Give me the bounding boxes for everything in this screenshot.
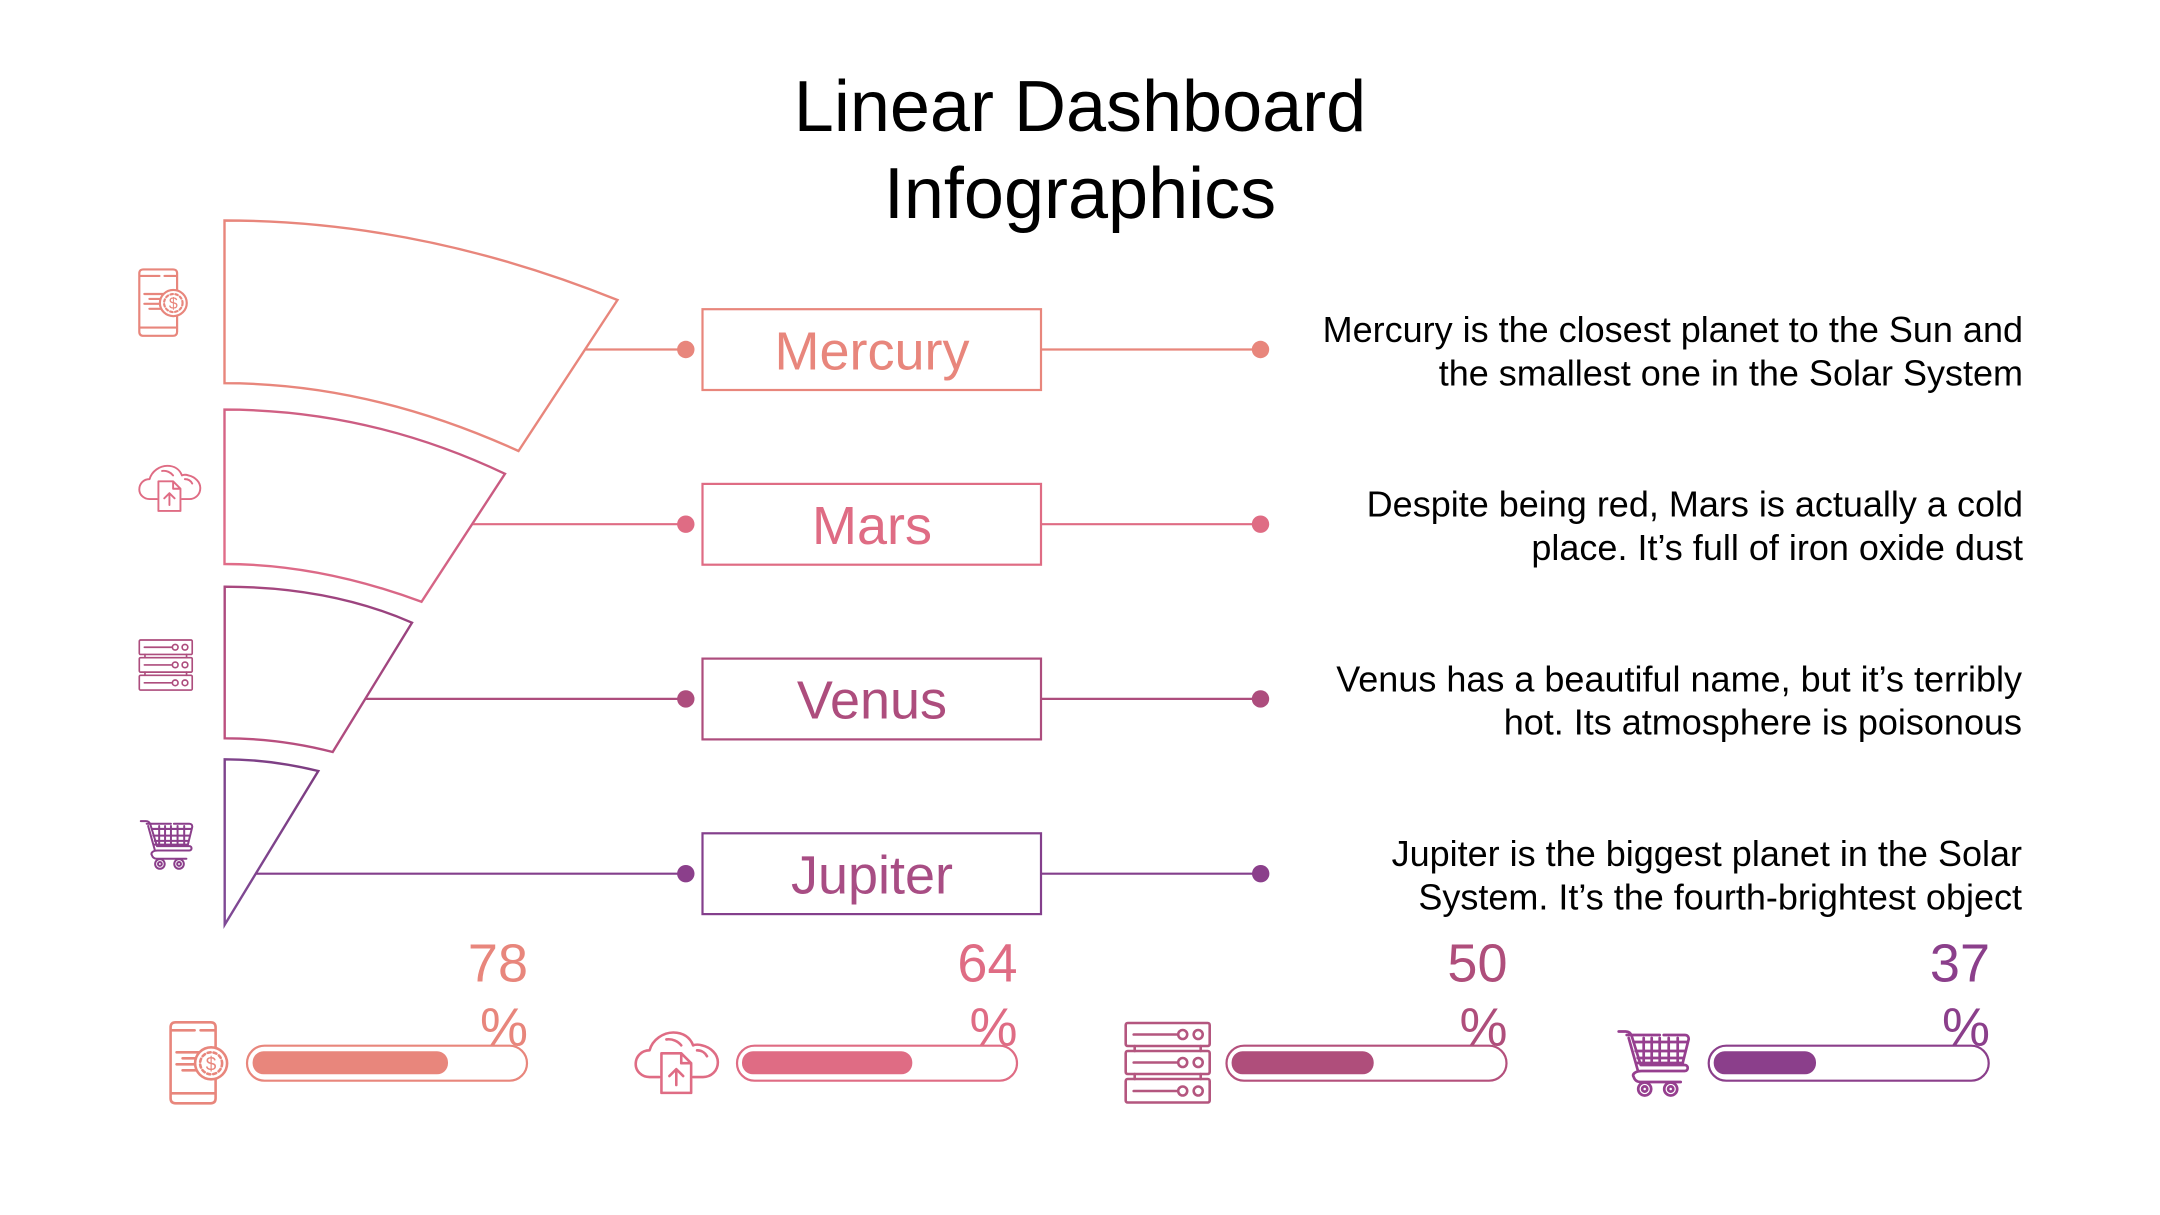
icon: cloud upload xyxy=(636,1032,718,1093)
row: Venus xyxy=(366,659,1269,739)
gauge: Jupiter 37%: 37 xyxy=(1930,934,1990,994)
gauge: Venus 50%: 50 xyxy=(1447,934,1508,994)
icon: phone with coin (left): $ xyxy=(169,296,178,313)
gauge: Mercury 78% xyxy=(171,934,528,1103)
gauge: Mercury 78%: % xyxy=(480,998,528,1058)
icon: shopping cart xyxy=(1619,1032,1689,1096)
funnel segment: Mars xyxy=(224,410,505,602)
gauge: Jupiter 37%: % xyxy=(1942,998,1990,1058)
icon: phone with coin xyxy=(171,1022,227,1103)
gauge: Mars 64%: % xyxy=(969,998,1018,1058)
description: Jupiter: System. It’s the fourth-brightest object xyxy=(1418,876,2022,917)
description: Jupiter: Jupiter is the biggest planet in the Solar xyxy=(1392,833,2022,874)
icon: phone with coin: $ xyxy=(206,1054,217,1075)
gauge: Mars 64% xyxy=(636,934,1018,1093)
description: Mercury: the smallest one in the Solar System xyxy=(1439,352,2023,393)
gauge: Venus 50%: % xyxy=(1459,998,1508,1058)
gauge: Venus 50% xyxy=(1126,934,1508,1102)
title xyxy=(794,67,1366,234)
row: Venus: Venus xyxy=(797,671,947,731)
row: Mercury xyxy=(586,309,1269,390)
description: Mars: place. It’s full of iron oxide dust xyxy=(1531,527,2023,568)
icon: cloud upload (left) xyxy=(139,466,200,511)
description: Venus: Venus has a beautiful name, but it’s terribly xyxy=(1336,658,2022,699)
description: Venus: hot. Its atmosphere is poisonous xyxy=(1504,702,2022,743)
row: Mars xyxy=(473,484,1269,565)
icon: shopping cart (left) xyxy=(141,821,192,869)
description: Mercury xyxy=(1323,309,2023,393)
funnel segment: Venus xyxy=(225,587,412,752)
row: Jupiter: Jupiter xyxy=(791,845,953,905)
title: Linear Dashboard xyxy=(794,67,1366,147)
icon: server stack xyxy=(1126,1023,1210,1102)
funnel segment: Jupiter xyxy=(225,759,318,925)
description: Mars xyxy=(1367,484,2023,568)
description: Mars: Despite being red, Mars is actually a cold xyxy=(1367,484,2023,525)
funnel segment: Mercury xyxy=(224,220,618,451)
icon: phone with coin (left) xyxy=(139,269,187,336)
gauge: Jupiter 37% xyxy=(1619,934,1990,1096)
title: Infographics xyxy=(884,154,1276,234)
gauge: Mercury 78%: 78 xyxy=(468,934,528,994)
row: Mars: Mars xyxy=(812,496,932,556)
description: Venus xyxy=(1336,658,2022,743)
icon: server stack (left) xyxy=(139,640,192,690)
description: Mercury: Mercury is the closest planet to the Sun and xyxy=(1323,309,2023,350)
row: Mercury: Mercury xyxy=(774,321,970,381)
row: Jupiter xyxy=(256,833,1269,914)
gauge: Mars 64%: 64 xyxy=(957,934,1018,994)
description: Jupiter xyxy=(1392,833,2022,917)
